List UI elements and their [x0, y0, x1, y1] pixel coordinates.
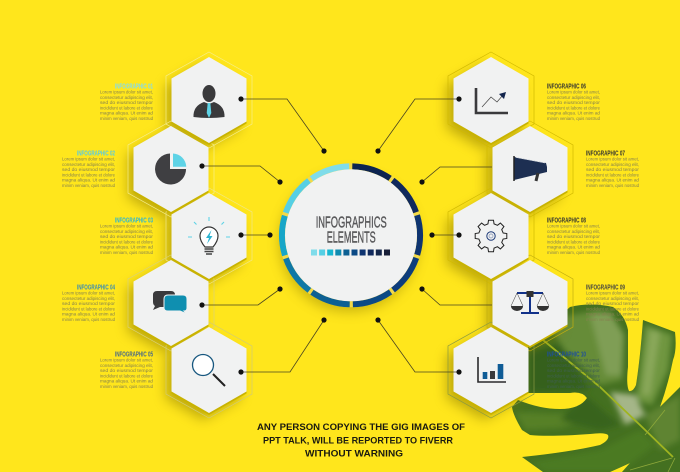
- text: infographic 03: [100, 218, 154, 255]
- bottom notice: [257, 422, 465, 460]
- text: infographic 08: consectetur adipiscing elit,: [547, 229, 600, 234]
- text: infographic 06: minim veniam, quis nostrud: [547, 116, 600, 121]
- text: infographic 08: [547, 218, 601, 255]
- hexagon 3: light bulb: [172, 193, 246, 281]
- text: infographic 05: [100, 352, 154, 389]
- text: infographic 03: incididunt ut labore et dolore: [100, 239, 153, 244]
- leaf: [505, 300, 680, 472]
- icon: magnifying glass: [192, 354, 225, 386]
- central circle: [254, 139, 448, 332]
- text: infographic 03: consectetur adipiscing elit,: [100, 229, 153, 234]
- text: infographic 02: [62, 150, 116, 188]
- hexagon outlines: [128, 52, 573, 418]
- text: infographic 10: minim veniam, quis nostrud: [547, 384, 600, 389]
- text: infographic 06: sed do eiusmod tempor: [547, 100, 601, 105]
- icon: pie chart: [155, 154, 186, 184]
- text: infographic 03: INFOGRAPHIC 03: [115, 218, 153, 224]
- icon: light bulb: [188, 217, 230, 254]
- text: infographic 04: minim veniam, quis nostrud: [62, 317, 115, 322]
- text: infographic 08: INFOGRAPHIC 08: [547, 218, 586, 224]
- text: infographic 07: minim veniam, quis nostrud: [586, 183, 639, 188]
- text: infographic 04: [62, 284, 116, 322]
- colour swatches: [311, 250, 390, 256]
- text: infographic 03: magna aliqua. Ut enim ad: [100, 245, 153, 250]
- text: infographic 01: sed do eiusmod tempor: [100, 100, 154, 105]
- text: infographic 02: consectetur adipiscing elit,: [62, 162, 115, 167]
- text: infographic 05: consectetur adipiscing elit,: [100, 363, 153, 368]
- text: infographic 09: INFOGRAPHIC 09: [586, 284, 625, 292]
- text: infographic 09: Lorem ipsum dolor sit amet,: [586, 290, 639, 296]
- text: infographic 10: sed do eiusmod tempor: [547, 368, 601, 373]
- text: infographic 04: Lorem ipsum dolor sit amet,: [62, 290, 115, 296]
- text: infographic 03: Lorem ipsum dolor sit amet,: [100, 224, 153, 228]
- text: infographic 10: Lorem ipsum dolor sit amet,: [547, 358, 600, 362]
- text: infographic 01: magna aliqua. Ut enim ad: [100, 111, 153, 116]
- text: infographic 02: incididunt ut labore et dolore: [62, 172, 115, 177]
- text: infographic 05: incididunt ut labore et dolore: [100, 373, 153, 378]
- icon: scales: [511, 291, 549, 313]
- hexagon 7: megaphone: [492, 126, 568, 214]
- icon: businessman: [193, 85, 225, 118]
- text: infographic 04: incididunt ut labore et dolore: [62, 306, 115, 311]
- text: infographic 08: incididunt ut labore et dolore: [547, 239, 600, 244]
- icon: megaphone: [514, 156, 547, 181]
- hexagon 8: gear: [454, 193, 528, 281]
- text: infographic 05: minim veniam, quis nostrud: [100, 384, 153, 389]
- text: infographic 07: consectetur adipiscing elit,: [586, 162, 639, 167]
- text: infographic 07: [586, 150, 640, 188]
- connector lines: [202, 99, 492, 372]
- text: infographic 07: sed do eiusmod tempor: [586, 167, 640, 172]
- text: infographic 03: sed do eiusmod tempor: [100, 234, 154, 239]
- text: infographic 08: sed do eiusmod tempor: [547, 234, 601, 239]
- text: infographic 05: INFOGRAPHIC 05: [115, 352, 153, 358]
- bottom notice: WITHOUT WARNING: [305, 448, 403, 460]
- text: infographic 02: INFOGRAPHIC 02: [77, 150, 115, 158]
- icon: line chart: [476, 88, 508, 113]
- central circle: ELEMENTS: [327, 229, 376, 246]
- icon: speech bubbles: [153, 291, 187, 314]
- text: infographic 10: magna aliqua. Ut enim ad: [547, 379, 600, 384]
- text: infographic 07: Lorem ipsum dolor sit amet,: [586, 156, 639, 162]
- text: infographic 02: sed do eiusmod tempor: [62, 167, 116, 172]
- text: infographic 01: incididunt ut labore et dolore: [100, 105, 153, 110]
- text: infographic 01: [100, 84, 154, 121]
- text: infographic 04: consectetur adipiscing elit,: [62, 296, 115, 301]
- hexagon 4: speech bubbles: [134, 260, 208, 348]
- text: infographic 05: Lorem ipsum dolor sit amet,: [100, 358, 153, 362]
- text: infographic 04: INFOGRAPHIC 04: [77, 284, 115, 292]
- text: infographic 07: incididunt ut labore et dolore: [586, 172, 639, 177]
- text: infographic 09: minim veniam, quis nostrud: [586, 317, 639, 322]
- hexagon 10: bar chart: [454, 327, 528, 415]
- text: infographic 04: magna aliqua. Ut enim ad: [62, 312, 115, 317]
- icon: bar chart: [478, 357, 506, 382]
- hexagon column shadows: [128, 64, 560, 420]
- text: infographic 05: sed do eiusmod tempor: [100, 368, 154, 373]
- text: infographic 03: minim veniam, quis nostrud: [100, 250, 153, 255]
- hexagon 9: scales: [492, 260, 568, 348]
- text: infographic 10: incididunt ut labore et dolore: [547, 373, 600, 378]
- text: infographic 10: INFOGRAPHIC 10: [547, 352, 586, 358]
- text: infographic 02: minim veniam, quis nostrud: [62, 183, 115, 188]
- text: infographic 09: magna aliqua. Ut enim ad: [586, 312, 639, 317]
- text: infographic 01: Lorem ipsum dolor sit amet,: [100, 90, 153, 94]
- text: infographic 05: magna aliqua. Ut enim ad: [100, 379, 153, 384]
- bottom notice: ANY PERSON COPYING THE GIG IMAGES OF: [257, 422, 465, 433]
- central title: INFOGRAPHICS: [316, 214, 387, 231]
- segmented ring: [254, 139, 448, 332]
- text: infographic 07: INFOGRAPHIC 07: [586, 150, 625, 158]
- text: infographic 06: magna aliqua. Ut enim ad: [547, 111, 600, 116]
- text: infographic 01: consectetur adipiscing elit,: [100, 95, 153, 100]
- text: infographic 10: consectetur adipiscing elit,: [547, 363, 600, 368]
- hexagon 2: pie chart: [134, 126, 208, 214]
- text: infographic 06: Lorem ipsum dolor sit amet,: [547, 90, 600, 94]
- text: infographic 09: consectetur adipiscing elit,: [586, 296, 639, 301]
- text: infographic 01: INFOGRAPHIC 01: [115, 84, 153, 90]
- hexagon 1: person: [172, 57, 246, 145]
- text: infographic 08: minim veniam, quis nostrud: [547, 250, 600, 255]
- text: infographic 09: sed do eiusmod tempor: [586, 301, 640, 306]
- text: infographic 08: Lorem ipsum dolor sit amet,: [547, 224, 600, 228]
- text: infographic 10: [547, 352, 601, 389]
- hexagon 6: line chart: [454, 57, 528, 145]
- text: infographic 06: INFOGRAPHIC 06: [547, 84, 586, 90]
- text: infographic 09: incididunt ut labore et dolore: [586, 306, 639, 311]
- text: infographic 07: magna aliqua. Ut enim ad: [586, 178, 639, 183]
- text: infographic 02: Lorem ipsum dolor sit amet,: [62, 156, 115, 162]
- central disc: [285, 169, 417, 301]
- text: infographic 06: incididunt ut labore et dolore: [547, 105, 600, 110]
- hexagon 5: magnifier: [172, 327, 246, 415]
- connector dots: [199, 96, 462, 375]
- text: infographic 01: minim veniam, quis nostrud: [100, 116, 153, 121]
- text: infographic 06: [547, 84, 601, 121]
- text: infographic 04: sed do eiusmod tempor: [62, 301, 116, 306]
- text: infographic 06: consectetur adipiscing elit,: [547, 95, 600, 100]
- text: infographic 09: [586, 284, 640, 322]
- text: infographic 02: magna aliqua. Ut enim ad: [62, 178, 115, 183]
- bottom notice: PPT TALK, WILL BE REPORTED TO FIVERR: [263, 436, 453, 446]
- text: infographic 08: magna aliqua. Ut enim ad: [547, 245, 600, 250]
- icon: gear: [475, 220, 507, 252]
